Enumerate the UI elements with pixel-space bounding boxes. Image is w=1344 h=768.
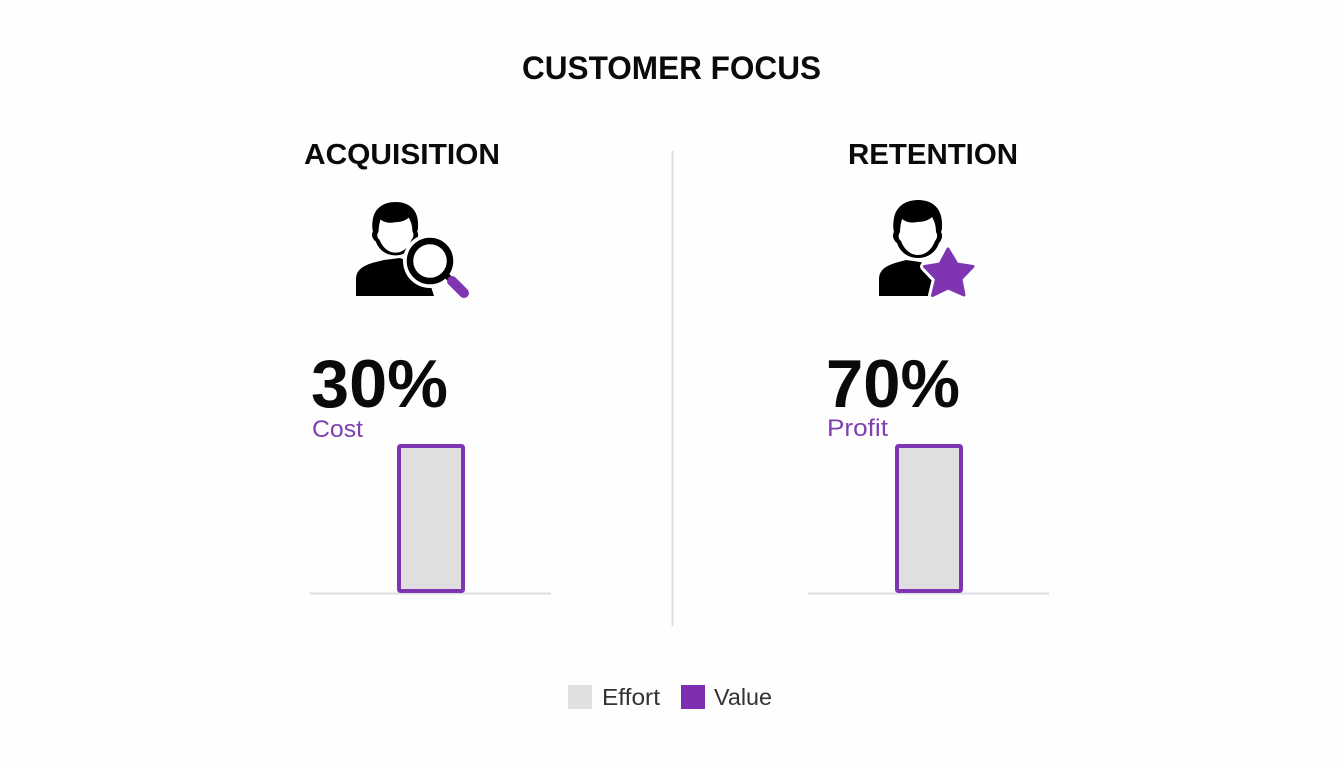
bar chart: acquisition bbox=[310, 446, 551, 594]
stat: 30%: 30% bbox=[311, 346, 448, 422]
legend item: value bbox=[681, 684, 772, 710]
legend item: effort bbox=[568, 684, 661, 710]
label: cost: Cost bbox=[312, 416, 363, 443]
heading: acquisition: ACQUISITION bbox=[304, 139, 500, 171]
icon: person with star bbox=[879, 200, 973, 296]
panel: retention bbox=[808, 139, 1049, 594]
icon: person with magnifying glass bbox=[356, 202, 464, 296]
bar chart: retention bbox=[808, 446, 1049, 594]
heading: retention: RETENTION bbox=[848, 139, 1018, 171]
legend bbox=[568, 684, 772, 710]
panel: acquisition bbox=[304, 139, 551, 594]
legend item: value: Value bbox=[714, 684, 772, 710]
legend item: effort: Effort bbox=[602, 684, 661, 710]
title: CUSTOMER FOCUS bbox=[522, 50, 821, 86]
stat: 70%: 70% bbox=[826, 346, 960, 422]
label: profit: Profit bbox=[827, 415, 888, 442]
